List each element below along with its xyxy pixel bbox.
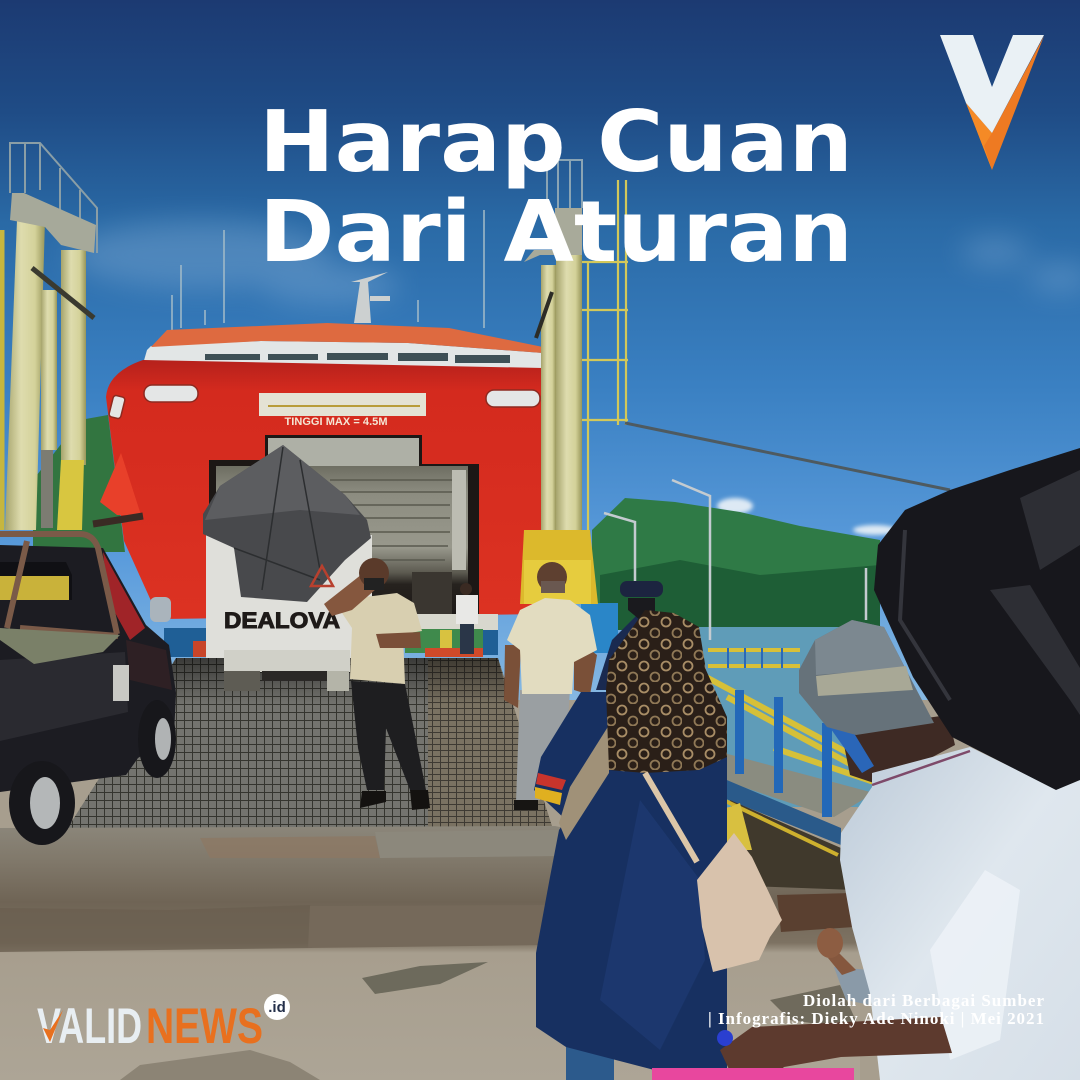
yellow trim bbox=[715, 796, 838, 855]
railing and dock bbox=[706, 648, 876, 932]
upper railing bbox=[547, 160, 582, 208]
rust plate bbox=[777, 893, 854, 932]
ladder bbox=[0, 230, 4, 530]
ship hull bbox=[106, 360, 543, 619]
legs bbox=[351, 681, 426, 795]
source credit bbox=[708, 991, 1044, 1028]
Validnews logo: NEWS bbox=[146, 998, 263, 1054]
woman with scarf bbox=[534, 610, 782, 1080]
mirror bbox=[150, 597, 171, 622]
scarf bbox=[606, 610, 727, 773]
tower head bbox=[524, 208, 582, 262]
shirt highlight bbox=[930, 870, 1020, 1060]
ship upper deck bbox=[143, 341, 543, 372]
tower head bbox=[10, 193, 96, 253]
shawl bbox=[559, 725, 609, 840]
rear wheel bbox=[9, 761, 75, 845]
tower base bbox=[520, 530, 598, 604]
child bbox=[817, 928, 870, 1005]
orange roof bbox=[151, 323, 543, 353]
source credit: | Infografis: Dieky Ade Ninoki | Mei 2021 bbox=[708, 1009, 1044, 1028]
tower posts bbox=[5, 220, 45, 530]
pickup truck bbox=[0, 534, 176, 845]
ground patches bbox=[0, 830, 860, 1080]
truck bbox=[203, 445, 372, 691]
.id badge: .id bbox=[268, 999, 286, 1016]
antennas bbox=[172, 210, 484, 332]
rear window bbox=[0, 562, 72, 600]
clouds bbox=[70, 221, 1080, 305]
title: Harap Cuan bbox=[259, 93, 853, 192]
suitcase bbox=[874, 448, 1080, 790]
brace bar bbox=[32, 268, 94, 318]
.id badge bbox=[264, 994, 290, 1020]
dress bbox=[534, 692, 727, 1073]
tower railing bbox=[10, 143, 97, 253]
raised arm bbox=[324, 567, 384, 616]
officer with cap bbox=[596, 581, 666, 690]
title bbox=[259, 93, 853, 282]
shirt bbox=[840, 747, 1080, 1080]
officer saluting bbox=[324, 558, 430, 810]
truck tarp bbox=[203, 445, 371, 602]
posts bbox=[541, 265, 556, 565]
truck: DEALOVA bbox=[224, 608, 340, 633]
ship height sign: TINGGI MAX = 4.5M bbox=[284, 416, 388, 428]
tarp bbox=[0, 628, 120, 664]
small distant person bbox=[456, 583, 478, 654]
cap bbox=[799, 620, 934, 735]
Validnews logo: VALID bbox=[37, 998, 142, 1054]
warning triangle bbox=[311, 566, 333, 586]
face mask bbox=[826, 720, 874, 773]
dock side bbox=[716, 778, 841, 845]
mooring cable bbox=[625, 423, 950, 490]
man carrying suitcase bbox=[652, 448, 1080, 1080]
sleeve stripes bbox=[535, 773, 566, 805]
interior slats bbox=[330, 480, 455, 560]
bottle cap bbox=[717, 1030, 733, 1046]
basin bbox=[652, 1068, 854, 1080]
brace bbox=[536, 292, 552, 338]
roll bar bbox=[0, 534, 118, 636]
ramp opening bbox=[209, 435, 479, 614]
handbag bbox=[697, 833, 782, 972]
fender bar bbox=[93, 516, 143, 524]
deck windows bbox=[205, 353, 510, 363]
forearm bbox=[376, 632, 421, 648]
near rails bbox=[706, 677, 876, 782]
legs bbox=[566, 1045, 614, 1080]
title: Dari Aturan bbox=[259, 183, 853, 282]
deck grating bbox=[65, 658, 552, 832]
head bbox=[359, 558, 389, 588]
central tower bbox=[520, 160, 628, 604]
shoes bbox=[360, 790, 430, 810]
officer standing bbox=[504, 562, 597, 810]
sky background bbox=[0, 0, 1080, 700]
ship height sign bbox=[259, 393, 426, 428]
torso bbox=[340, 593, 422, 684]
posts bbox=[735, 690, 832, 817]
bow fender bbox=[100, 453, 141, 515]
distant doorway bbox=[412, 572, 452, 614]
red cab panel bbox=[103, 552, 145, 640]
ship base and ramp bbox=[164, 603, 618, 657]
truck chassis bbox=[224, 650, 350, 672]
concrete ground bbox=[0, 826, 860, 1080]
under dock bbox=[730, 800, 855, 890]
mast bbox=[351, 272, 390, 323]
far railing bbox=[708, 650, 800, 666]
source credit: Diolah dari Berbagai Sumber bbox=[803, 991, 1044, 1010]
truck body bbox=[206, 535, 372, 658]
Validnews logo bbox=[37, 994, 290, 1054]
front wheel bbox=[138, 700, 176, 778]
dock deck bbox=[722, 753, 874, 817]
brand mark V bbox=[940, 35, 1044, 170]
yellow bag bbox=[709, 803, 752, 850]
small white clouds bbox=[717, 498, 897, 535]
ladder cage bbox=[582, 180, 628, 600]
sea bbox=[698, 627, 878, 807]
bed bbox=[0, 652, 128, 741]
bag strap bbox=[645, 773, 697, 862]
body bbox=[0, 545, 176, 792]
green hills bbox=[33, 415, 880, 630]
ship bbox=[93, 210, 543, 619]
portholes bbox=[109, 385, 540, 419]
street lamps bbox=[604, 480, 866, 640]
arm bbox=[720, 1017, 952, 1080]
neck bbox=[841, 715, 955, 785]
collar stripes bbox=[872, 751, 970, 785]
left crane tower bbox=[2, 143, 97, 530]
